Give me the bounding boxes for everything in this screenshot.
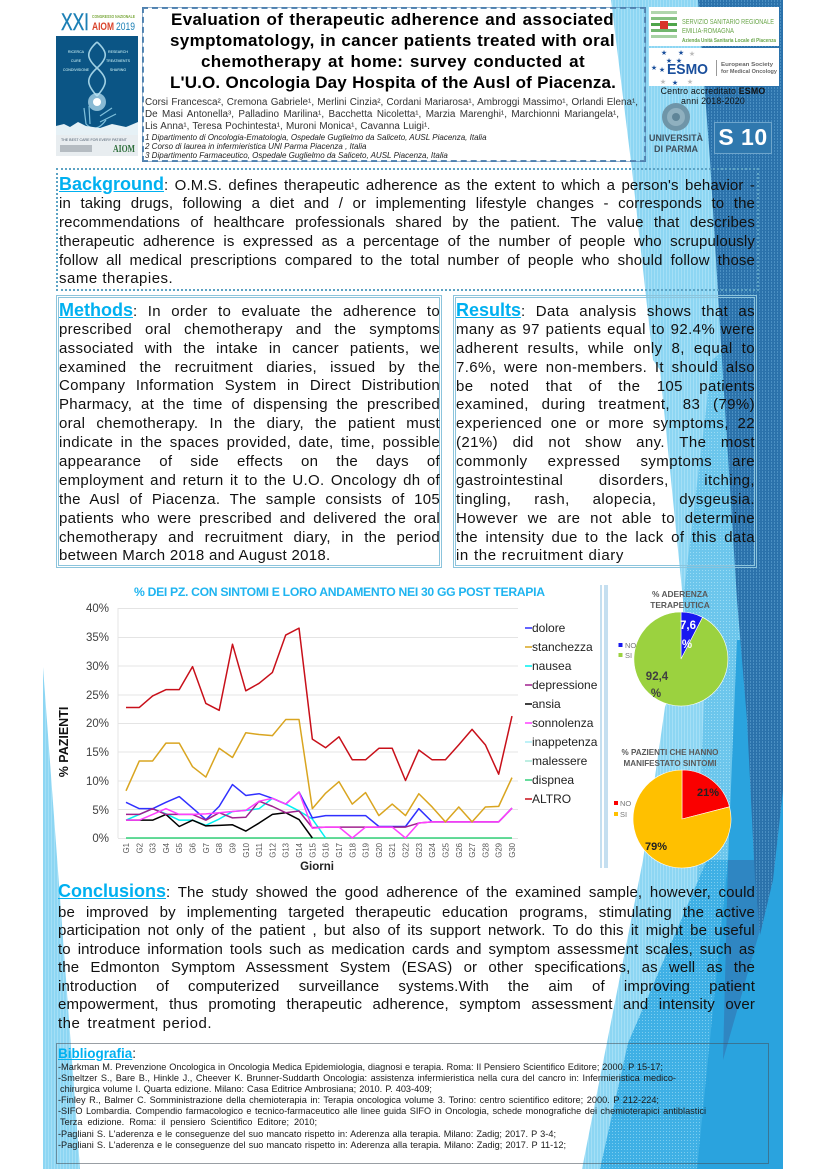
logo: ESMO: ★ bbox=[661, 49, 667, 57]
chart legend bbox=[525, 621, 598, 806]
results text: 7.6%, were non-members. It should also bbox=[456, 359, 755, 376]
methods text: examined the recruitment diaries, issued by the bbox=[59, 359, 440, 376]
x axis labels: G29 bbox=[495, 843, 504, 858]
conclusions text bbox=[58, 881, 755, 1032]
results text: experienced one or more symptoms, 22 bbox=[456, 415, 755, 432]
pie labels: 92,4 bbox=[646, 671, 669, 683]
x axis labels: G8 bbox=[215, 843, 224, 853]
x axis labels: G13 bbox=[282, 843, 291, 858]
y axis labels bbox=[86, 603, 109, 845]
methods text: chemotherapy and recruitment diary, in the period bbox=[59, 529, 440, 546]
chart legend: dispnea bbox=[532, 773, 574, 787]
results text: gastrointestinal disorders, itching, bbox=[456, 472, 755, 489]
conclusions text: participation not only of the patient , but also of its support network. To do this it might be useful bbox=[58, 922, 755, 939]
pie title: % ADERENZA bbox=[652, 589, 708, 599]
pie title: TERAPEUTICA bbox=[650, 600, 710, 610]
chart legend: inappetenza bbox=[532, 735, 598, 749]
session badge S 10: S 10 bbox=[718, 124, 768, 150]
methods text: indicate in the spaces provided, date, time, possible bbox=[59, 434, 440, 451]
background text bbox=[59, 174, 755, 287]
conclusions text: be improved by implementing targeted therapeutic education programs, stimulating the active bbox=[58, 904, 755, 921]
bibliography: chirurgica volume I. Quarta edizione. Milano: Casa Editrice Ambrosiana; 2010. P. 403-409; bbox=[60, 1084, 432, 1094]
results text: many as 97 patients equal to 92.4% were bbox=[456, 321, 755, 338]
x axis labels: G11 bbox=[255, 843, 264, 857]
authors: De Masi Antonella³, Palladino Marilina¹, Bacchetta Nicoletta¹, Marzia Marenghi¹, Marchionni Mariangela¹, bbox=[145, 109, 619, 120]
y axis labels: 5% bbox=[92, 805, 109, 817]
x axis labels: G6 bbox=[189, 843, 198, 853]
panel: bibliography bbox=[56, 1043, 769, 1164]
methods text: employment and return it to the U.O. Oncology dh of bbox=[59, 472, 440, 489]
chart legend: malessere bbox=[532, 754, 588, 768]
logo: ESMO: ★ bbox=[689, 50, 695, 58]
x axis labels: G20 bbox=[375, 842, 384, 858]
y axis labels: 0% bbox=[92, 833, 109, 845]
background text: same therapies. bbox=[59, 270, 173, 287]
chart legend: ansia bbox=[532, 697, 561, 711]
logo: ESMO: ★ bbox=[678, 49, 684, 57]
background text: in taking drugs, following a diet and / or implementing lifestyle changes - corresponds to the bbox=[59, 195, 755, 212]
authors: Lis Anna¹, Teresa Pochintesta¹, Muroni Monica¹, Cavanna Luigi¹. bbox=[145, 121, 430, 132]
x axis labels: G12 bbox=[268, 843, 277, 858]
x axis labels: G22 bbox=[402, 843, 410, 858]
results text: be noted that of the 105 patients bbox=[456, 378, 755, 395]
chart title: % DEI PZ. CON SINTOMI E LORO ANDAMENTO NEI 30 GG POST TERAPIA bbox=[134, 585, 545, 599]
y axis labels: 35% bbox=[86, 632, 109, 644]
conclusions text: the Edmonton Symptom Assessment System (ESAS) or other specifications, as well as the bbox=[58, 959, 755, 976]
poster logo: XXI Congresso AIOM 2019: RESEARCH bbox=[108, 50, 128, 54]
methods text bbox=[59, 300, 440, 564]
x axis labels: G30 bbox=[508, 842, 517, 858]
methods text: the Ausl of Piacenza. The sample consists of 105 bbox=[59, 491, 440, 508]
ESMO accreditation text: Centro accreditato ESMO bbox=[661, 86, 765, 96]
chart legend: nausea bbox=[532, 659, 572, 673]
logo: Università di Parma: DI PARMA bbox=[654, 144, 698, 154]
title bbox=[170, 10, 616, 92]
x axis title: Giorni bbox=[300, 861, 334, 873]
x axis labels: G26 bbox=[455, 843, 464, 858]
logo: ESMO: for Medical Oncology bbox=[721, 69, 778, 75]
logo: ESMO: ★ bbox=[687, 78, 693, 86]
bibliography bbox=[58, 1046, 706, 1150]
bibliography: Terza edizione. Roma: il pensiero Scientifico Editore; 2010; bbox=[60, 1116, 317, 1126]
title panel bbox=[142, 7, 646, 162]
methods text: associated with the intake in cancer patients, we bbox=[59, 340, 440, 357]
logo: Università di Parma bbox=[649, 103, 703, 154]
title: chemotherapy at home: survey conducted at bbox=[201, 52, 585, 71]
pie title: % PAZIENTI CHE HANNO bbox=[622, 748, 718, 757]
x axis labels: G10 bbox=[242, 842, 251, 858]
y axis labels: 10% bbox=[86, 776, 109, 788]
x axis labels: G2 bbox=[135, 843, 144, 853]
authors: Corsi Francesca², Cremona Gabriele¹, Merlini Cinzia², Cordani Mariarosa¹, Ambroggi Massimo¹, Orlandi Elena¹, bbox=[145, 97, 638, 108]
pie legend bbox=[618, 641, 636, 660]
methods text: oral chemotherapy. In the diary, the patient must bbox=[59, 415, 440, 432]
conclusions text: the treatment period. bbox=[58, 1015, 212, 1032]
title: L'U.O. Oncologia Day Hospita of the Ausl of Piacenza. bbox=[170, 73, 616, 92]
poster logo: XXI Congresso AIOM 2019 bbox=[56, 12, 138, 156]
results text: adherent results, while only 8, equal to bbox=[456, 340, 755, 357]
x axis labels: G21 bbox=[388, 843, 397, 858]
y axis title: % PAZIENTI bbox=[57, 707, 71, 777]
logo: ESMO: European Society bbox=[721, 62, 774, 68]
y axis labels: 40% bbox=[86, 603, 109, 615]
background text: recommendations of healthcare professionals shared by the patient. The value that describes bbox=[59, 214, 755, 231]
pie labels bbox=[646, 620, 696, 700]
methods text: prescribed oral chemotherapy and the symptoms bbox=[59, 321, 440, 338]
panel: results bbox=[453, 295, 757, 568]
x axis labels: G7 bbox=[202, 843, 211, 853]
x axis labels: G28 bbox=[481, 843, 490, 858]
logo: ESMO: ★ bbox=[651, 64, 657, 72]
pie labels: % bbox=[682, 639, 692, 651]
bibliography: -Finley R., Balmer C. Somministrazione della chemioterapia in: Terapia oncologica volume 3. Torino: centro scientifico editore; 2000. P 212-224; bbox=[58, 1094, 659, 1104]
pie labels: 7,6 bbox=[680, 620, 696, 632]
results text: in the recruitment diary bbox=[456, 547, 624, 564]
chart legend: depressione bbox=[532, 678, 598, 692]
pie labels: 79% bbox=[645, 841, 667, 853]
x axis labels: G16 bbox=[322, 843, 331, 858]
poster logo: XXI Congresso AIOM 2019: TREATMENTS bbox=[106, 59, 131, 63]
methods text: Company Information System in Direct Distribution bbox=[59, 377, 440, 394]
x axis labels: G4 bbox=[162, 842, 171, 853]
bibliography: -Pagliani S. L'aderenza e le conseguenze del suo mancato rispetto in: Aderenza alla terapia. Milano: Zadig; 2017. P 11-12; bbox=[58, 1140, 566, 1150]
chart legend: sonnolenza bbox=[532, 716, 594, 730]
panel: methods bbox=[56, 295, 442, 568]
logo: ESMO: ★ bbox=[676, 57, 682, 65]
chart legend: dolore bbox=[532, 621, 566, 635]
poster logo: XXI Congresso AIOM 2019: RICERCA bbox=[68, 50, 85, 54]
results text: the intensity due to the lack of this data bbox=[456, 529, 755, 546]
background text: Background: O.M.S. defines therapeutic adherence as the extent to which a person's behavior - bbox=[59, 174, 755, 194]
line chart: symptoms over 30 days bbox=[57, 585, 598, 873]
pie chart: adherence bbox=[618, 589, 728, 706]
conclusions text: to introduce information tools such as medication cards and symptom assessment scales, such as bbox=[58, 941, 755, 958]
x axis labels: G15 bbox=[308, 842, 317, 858]
methods text: Pharmacy, at the time of dispensing the prescribed bbox=[59, 396, 440, 413]
background text: follow all medical prescriptions compared to the total number of people who should follow those bbox=[59, 252, 755, 269]
bibliography: -Smeltzer S., Bare B., Hinkle J., Cheever K. Brunner-Suddarth Oncologia: assistenza infermieristica nella cura del cancro in: Infermieristica medico- bbox=[58, 1072, 676, 1082]
logo: ESMO: ★ bbox=[666, 57, 672, 65]
results text: Results: Data analysis shows that as bbox=[456, 300, 755, 320]
methods text: appearance of side effects on the days of bbox=[59, 453, 440, 470]
pie labels: 21% bbox=[697, 787, 719, 799]
pie chart: patients with symptoms bbox=[614, 748, 732, 868]
logo: Università di Parma: UNIVERSITÀ bbox=[649, 133, 703, 143]
logo: ESMO: ESMO bbox=[667, 61, 708, 78]
title: symptomatology, in cancer patients treated with oral bbox=[170, 31, 615, 50]
panel: background bbox=[56, 168, 759, 291]
results text bbox=[456, 300, 755, 564]
pie legend bbox=[614, 799, 631, 819]
x axis labels: G9 bbox=[228, 843, 238, 853]
y axis labels: 30% bbox=[86, 661, 109, 673]
x axis labels: G23 bbox=[415, 843, 424, 858]
results text: tingling, rash, alopecia, dysgeusia. bbox=[456, 491, 755, 508]
pie legend: SI bbox=[625, 651, 632, 660]
methods text: between March 2018 and August 2018. bbox=[59, 547, 331, 564]
results text: However we are not able to determine bbox=[456, 510, 755, 527]
poster logo: XXI Congresso AIOM 2019: CONDIVISIONE bbox=[63, 68, 90, 72]
pie slices bbox=[682, 770, 730, 819]
x axis labels bbox=[122, 842, 517, 858]
logo: ESMO: ★ bbox=[659, 66, 665, 74]
poster logo: XXI Congresso AIOM 2019: THE BEST CARE FOR EVERY PATIENT bbox=[61, 138, 128, 142]
results text: commonly expressed symptoms are bbox=[456, 453, 755, 470]
logo: Servizio Sanitario Regionale: EMILIA-ROMAGNA bbox=[682, 28, 734, 35]
x axis labels: G17 bbox=[335, 843, 344, 858]
pie slices bbox=[681, 612, 703, 659]
x axis labels: G18 bbox=[348, 843, 357, 858]
bibliography: -SIFO Lombardia. Compendio farmacologico e tecnico-farmaceutico alle linee guida SIFO in Oncologia, schede monografiche dei chemioterapici antiblastici bbox=[58, 1106, 706, 1116]
chart legend: ALTRO bbox=[532, 792, 571, 806]
logo: ESMO: ★ bbox=[660, 78, 666, 86]
bibliography: -Markman M. Prevenzione Oncologica in Oncologia Medica Epidemiologia, diagnosi e terapia. Roma: Il Pensiero Scientifico Editore; 2000. P 15-17; bbox=[58, 1062, 663, 1072]
authors bbox=[145, 97, 638, 132]
methods text: patients who were prescribed and delivered the oral bbox=[59, 510, 440, 527]
affiliations: 2 Corso di laurea in infermieristica UNI Parma Piacenza , Italia bbox=[145, 142, 366, 151]
pie labels bbox=[645, 787, 719, 853]
poster logo: XXI Congresso AIOM 2019: SHARING bbox=[110, 68, 126, 72]
x axis labels: G25 bbox=[441, 842, 450, 858]
bibliography: -Pagliani S. L'aderenza e le conseguenze del suo mancato rispetto in: Aderenza alla terapia. Milano: Zadig; 2017. P 3-4; bbox=[58, 1128, 556, 1138]
pie legend: NO bbox=[620, 799, 631, 808]
x axis labels: G5 bbox=[175, 842, 184, 853]
ESMO accreditation text: anni 2018-2020 bbox=[681, 96, 745, 106]
pie title bbox=[650, 589, 710, 610]
affiliations: 1 Dipartimento di Oncologia-Ematologia, Ospedale Guglielmo da Saliceto, AUSL Piacenza, Italia bbox=[145, 133, 487, 142]
conclusions text: introduction of computerized surveillance systems.With the aim of improving patient bbox=[58, 978, 755, 995]
pie labels: % bbox=[651, 688, 661, 700]
conclusions text: empowerment, thus promoting therapeutic adherence, symptom assessment and intensity over bbox=[58, 996, 755, 1013]
x axis labels: G1 bbox=[122, 843, 131, 853]
pie title: MANIFESTATO SINTOMI bbox=[624, 759, 716, 768]
methods text: Methods: In order to evaluate the adherence to bbox=[59, 300, 440, 320]
x axis labels: G14 bbox=[295, 842, 304, 858]
x axis labels: G24 bbox=[428, 842, 437, 858]
y axis labels: 20% bbox=[86, 718, 109, 730]
x axis labels: G27 bbox=[468, 843, 477, 858]
conclusions text: Conclusions: The study showed the good adherence of the examined sample, however, could bbox=[58, 881, 755, 901]
affiliations bbox=[145, 133, 487, 160]
background text: therapeutic adherence is expressed as a percentage of the number of people who scrupulously bbox=[59, 233, 755, 250]
x axis labels: G3 bbox=[149, 843, 158, 853]
bibliography heading: Bibliografia: bbox=[58, 1046, 136, 1061]
results text: (21%) did not show any. The most bbox=[456, 434, 755, 451]
poster logo: XXI Congresso AIOM 2019: AIOM bbox=[92, 21, 114, 33]
logo: Servizio Sanitario Regionale bbox=[649, 7, 779, 46]
pie title bbox=[622, 748, 718, 768]
x axis labels: G19 bbox=[362, 843, 371, 858]
pie legend: SI bbox=[620, 810, 627, 819]
y axis labels: 25% bbox=[86, 690, 109, 702]
divider between charts bbox=[600, 585, 604, 868]
poster logo: XXI Congresso AIOM 2019: CURE bbox=[71, 59, 82, 63]
chart legend: stanchezza bbox=[532, 640, 593, 654]
results text: examined, during treatment, 83 (79%) bbox=[456, 396, 755, 413]
affiliations: 3 Dipartimento Farmaceutico, Ospedale Guglielmo da Saliceto, AUSL Piacenza, Italia bbox=[145, 151, 448, 160]
title: Evaluation of therapeutic adherence and associated bbox=[171, 10, 614, 29]
y axis labels: 15% bbox=[86, 747, 109, 759]
pie legend: NO bbox=[625, 641, 636, 650]
logo: ESMO bbox=[649, 48, 779, 86]
ESMO accreditation text bbox=[661, 86, 765, 106]
session badge S 10 bbox=[714, 122, 772, 154]
data lines bbox=[126, 628, 512, 838]
